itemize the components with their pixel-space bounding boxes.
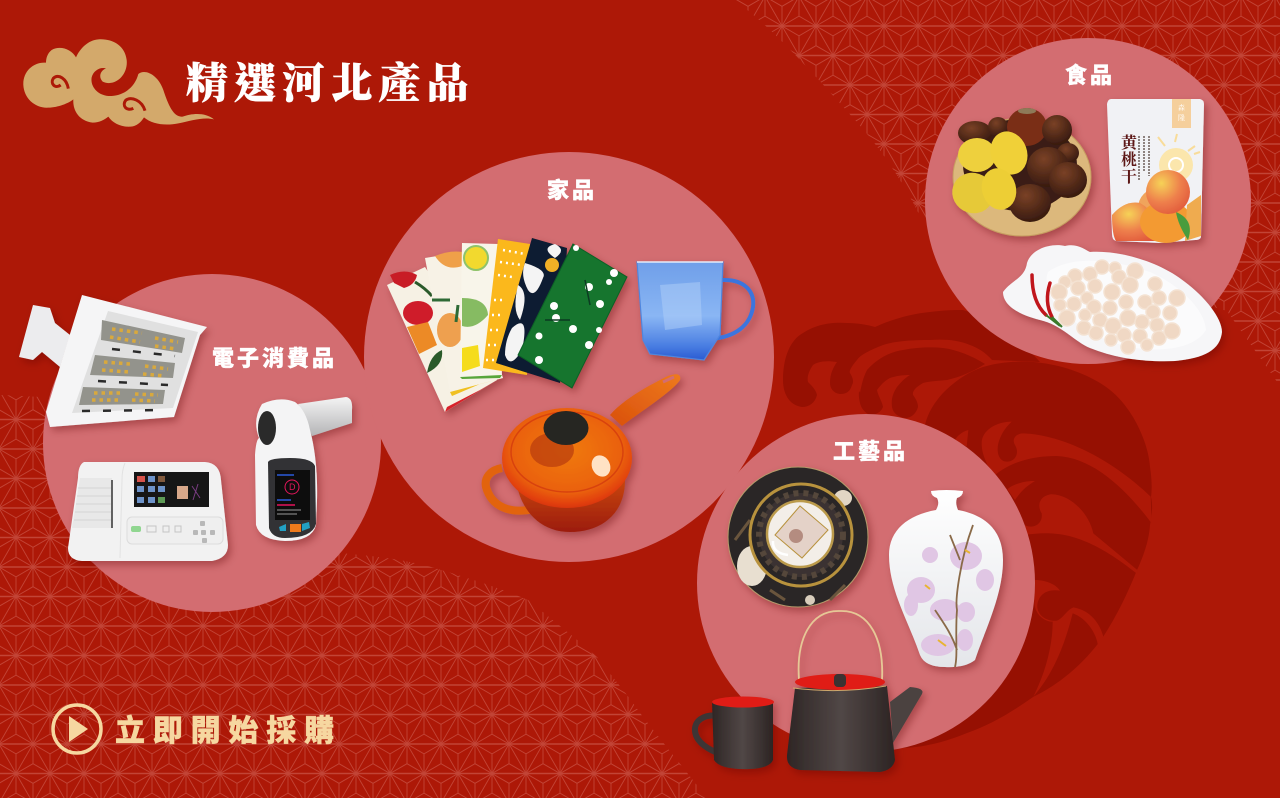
title: 精選河北產品 [186,60,475,108]
product: ECG monitor [68,462,228,561]
product: spirometer [255,397,352,541]
panel: crafts circle [697,414,1035,752]
icon: play [53,705,101,753]
panel: electronics circle [43,274,381,612]
pattern: top right [734,0,1280,386]
product: blue glass mug [637,262,753,360]
pattern: bottom left [0,395,707,798]
product: LED flood light [19,295,207,427]
product: dried peach bag: 桃 [1121,150,1138,169]
product: teapot [787,611,922,772]
product: dried peach bag: 干 [1121,168,1137,186]
product: black floral plate [728,467,868,607]
product: spirometer: D [289,482,296,492]
product: black mug [695,696,774,769]
product: dried peach bag: 隆 [1178,113,1185,122]
product: magnolia vase [889,490,1003,667]
product: towels [387,238,627,412]
heading: home goods: 家品 [547,178,597,203]
wave emblem [783,310,1152,752]
call to action text: 立即開始採購 [115,714,342,748]
product: chestnut bowl [945,108,1091,236]
panel: food circle [925,38,1251,364]
logo cloud [23,39,214,127]
heading: electronics: 電子消費品 [212,346,337,371]
product: orange saucepan [486,374,680,532]
product: dried peach bag: 森 [1178,103,1185,112]
button: start shopping [53,705,342,753]
product: dried peach bag: 黄 [1121,133,1139,152]
product: scallop plate [1003,245,1222,361]
panel: home goods circle [364,152,774,562]
heading: food: 食品 [1065,63,1115,88]
product: dried peach bag [1107,99,1204,243]
heading: crafts: 工藝品 [833,439,908,464]
